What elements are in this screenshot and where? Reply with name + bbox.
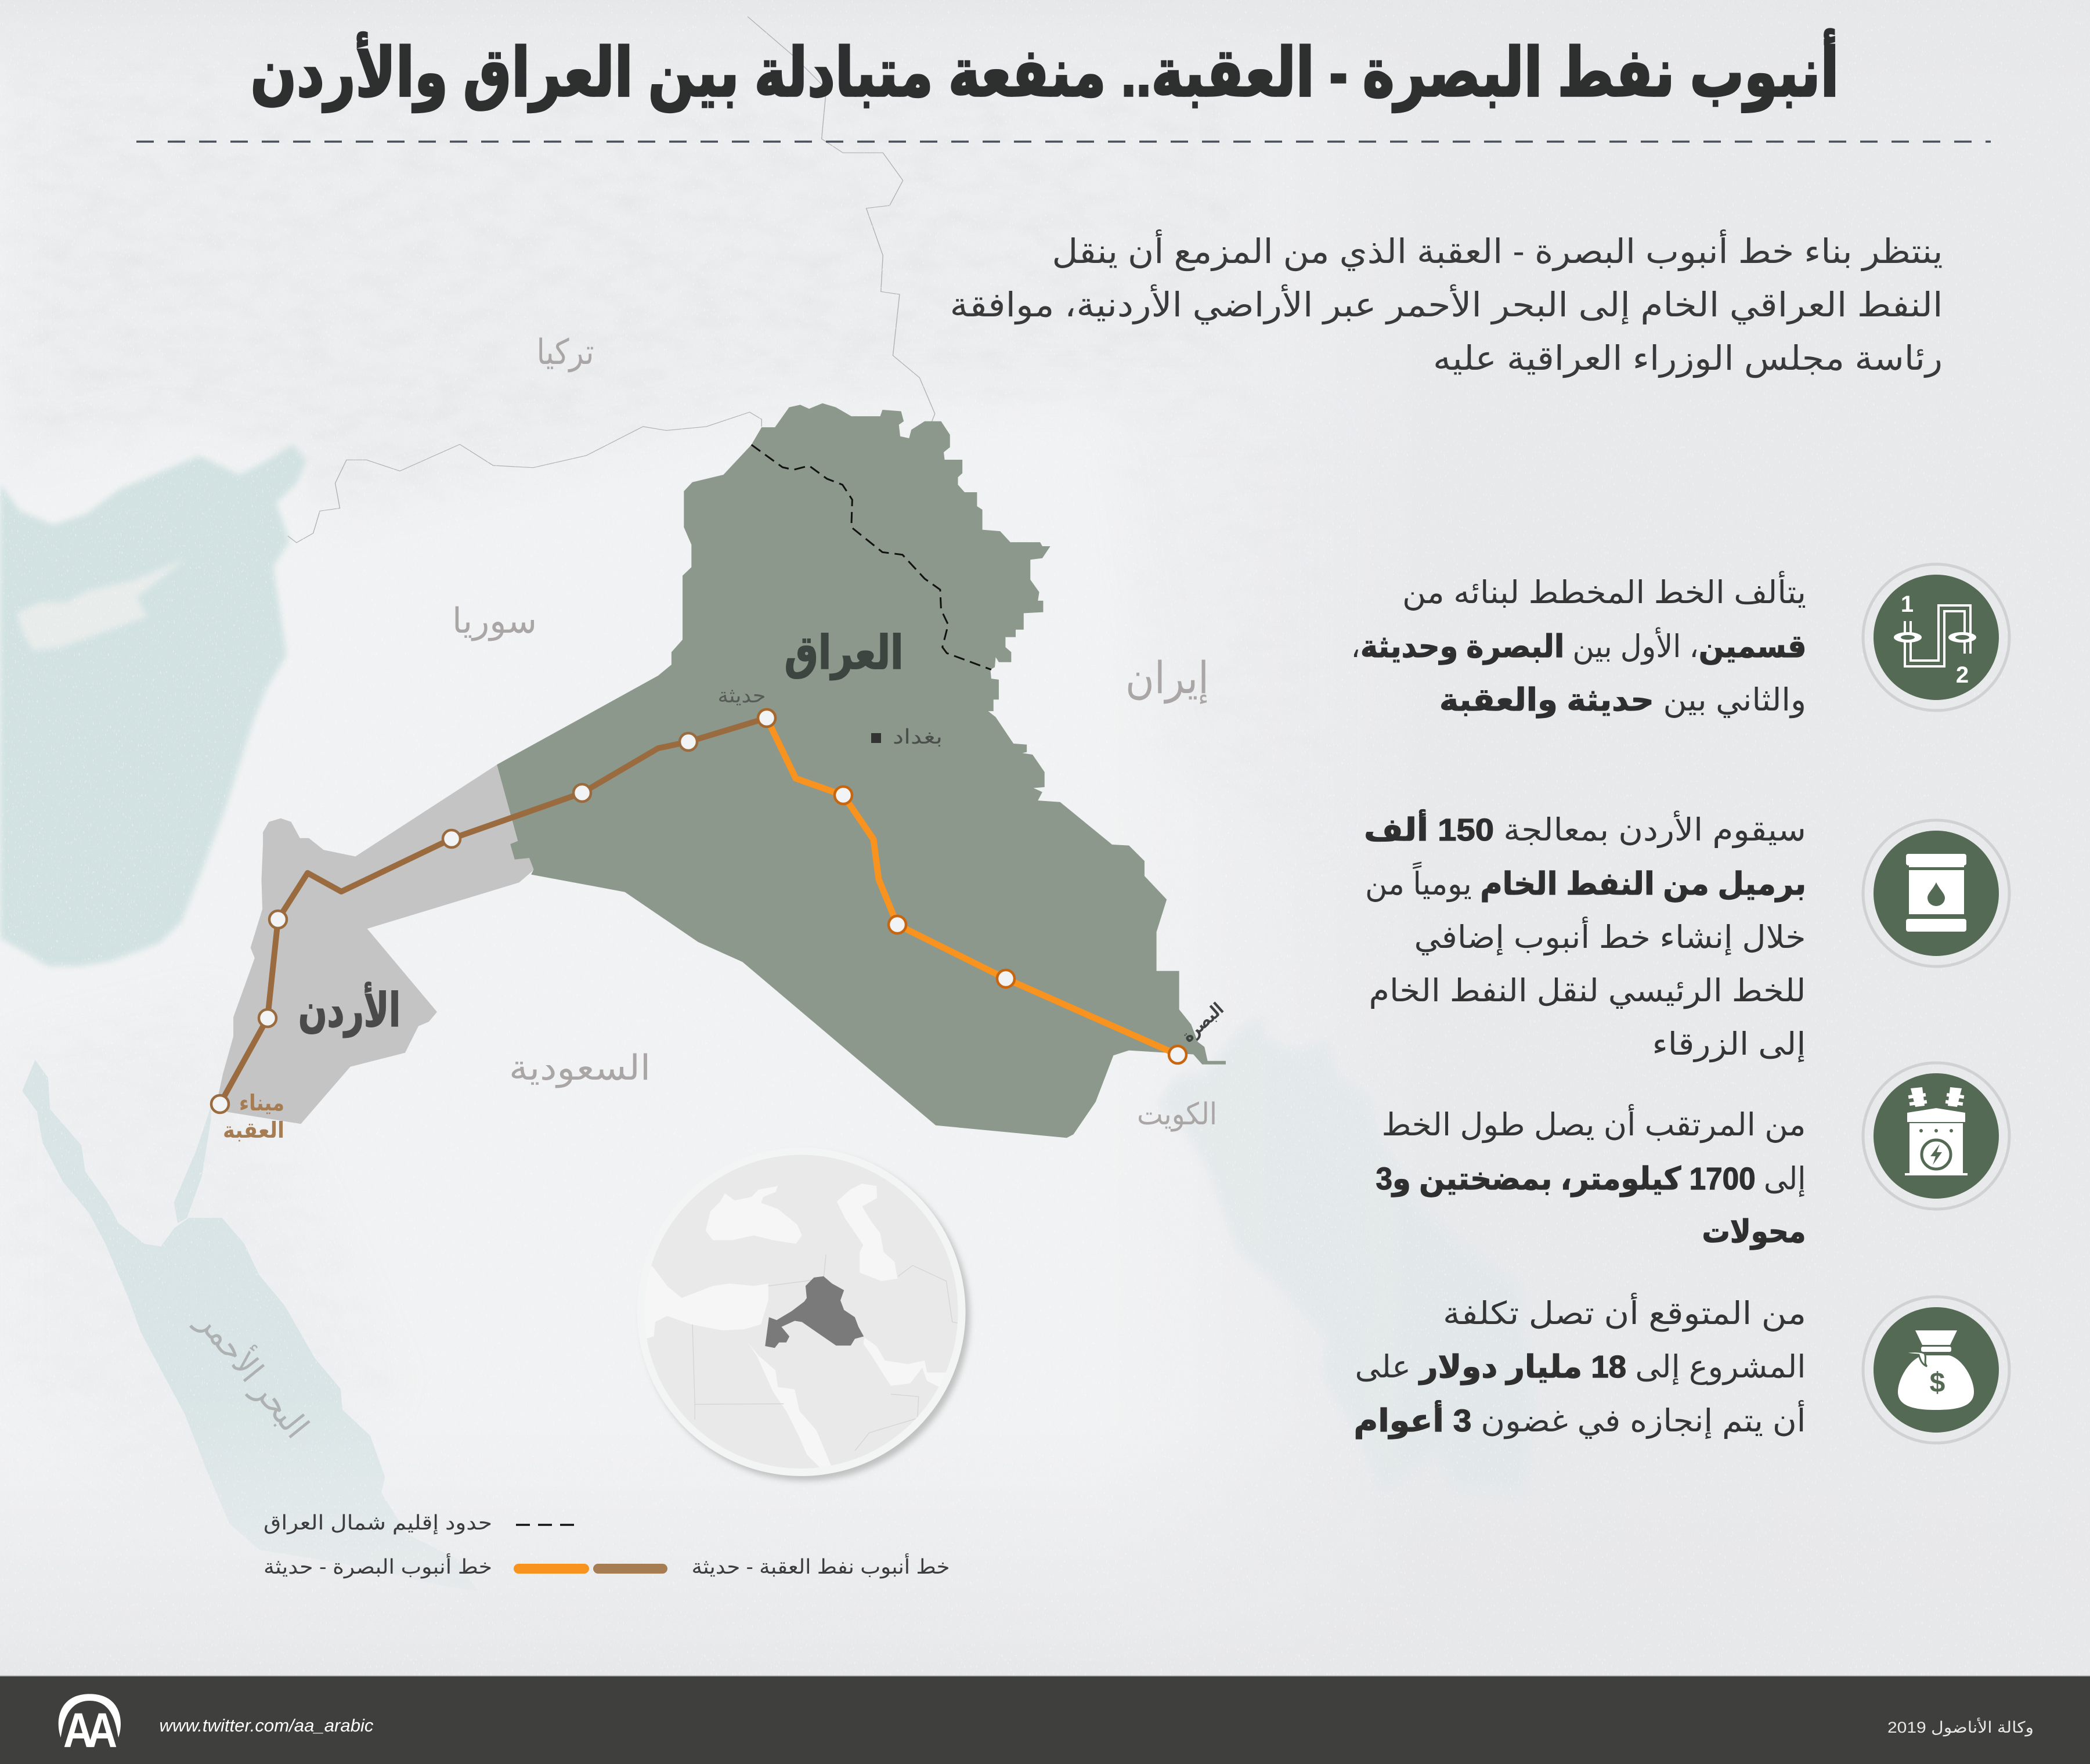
panel: Jordan processing: للخط الرئيسي لنقل النفط الخام xyxy=(1369,973,1806,1009)
panel: two sections xyxy=(1351,571,1806,718)
pipeline: Aqaba - Haditha xyxy=(211,718,767,1113)
panel: Jordan processing: خلال إنشاء خط أنبوب إضافي xyxy=(1414,917,1806,955)
map labels: العراق xyxy=(785,627,903,680)
icon: transformer xyxy=(1863,1063,2009,1209)
map labels: حديثة xyxy=(717,684,766,707)
map labels: الكويت xyxy=(1137,1098,1217,1132)
sea: Mediterranean xyxy=(0,445,306,966)
footer bar xyxy=(0,1676,2090,1764)
map labels: البحر الأحمر xyxy=(189,1301,317,1446)
icon: money bag xyxy=(1863,1297,2009,1443)
panel: Jordan processing xyxy=(1364,809,1806,1062)
map labels: السعودية xyxy=(509,1048,651,1088)
borders: Turkey, Syria, Iran xyxy=(288,17,935,543)
map: Iraq xyxy=(497,403,1226,1138)
map labels: العقبة xyxy=(223,1119,284,1143)
icon: money bag: $ xyxy=(1930,1368,1945,1398)
map labels: البصرة xyxy=(1178,1000,1228,1046)
panel: cost: من المتوقع أن تصل تكلفة xyxy=(1443,1293,1806,1332)
legend: خط أنبوب نفط العقبة - حديثة xyxy=(692,1553,950,1579)
map labels: الأردن xyxy=(298,982,400,1038)
logo: AA xyxy=(59,1694,121,1758)
map: northern Iraq region border xyxy=(752,445,991,670)
icon: pipeline sections xyxy=(1863,564,2009,710)
panel: length and stations: محولات xyxy=(1702,1214,1806,1250)
footer bar: وكالة الأناضول 2019 xyxy=(1887,1717,2034,1737)
panel: length and stations xyxy=(1376,1104,1806,1250)
logo: AA: AA xyxy=(63,1703,117,1758)
footer bar: www.twitter.com/aa_arabic xyxy=(159,1715,374,1736)
map labels: بغداد xyxy=(893,726,943,748)
legend: حدود إقليم شمال العراق xyxy=(263,1512,492,1535)
panel: cost: أن يتم إنجازه في غضون 3 أعوام xyxy=(1353,1400,1806,1439)
background: base map xyxy=(0,417,1137,1448)
map labels: إيران xyxy=(1125,654,1209,704)
intro text: ينتظر بناء خط أنبوب البصرة - العقبة الذي من المزمع أن ينقل xyxy=(1052,229,1943,272)
panel: two sections: يتألف الخط المخطط لبنائه من xyxy=(1402,571,1806,611)
intro text xyxy=(950,229,1943,378)
panel: length and stations: من المرتقب أن يصل طول الخط xyxy=(1381,1104,1806,1143)
locator globe xyxy=(633,1148,970,1481)
sea: Red Sea xyxy=(22,1060,478,1591)
icon: pipeline sections: 2 xyxy=(1956,662,1969,688)
panel: Jordan processing: برميل من النفط الخام يومياً من xyxy=(1365,861,1806,902)
pipeline: Basra - Haditha xyxy=(758,709,1186,1063)
panel: two sections: قسمين، الأول بين البصرة وحديثة، xyxy=(1351,627,1806,665)
map labels: ميناء xyxy=(239,1091,284,1116)
panel: two sections: والثاني بين حديثة والعقبة xyxy=(1439,683,1806,718)
icon: oil barrel xyxy=(1863,820,2009,966)
panel: Jordan processing: إلى الزرقاء xyxy=(1652,1027,1806,1062)
map labels: تركيا xyxy=(536,333,594,373)
panel: length and stations: إلى 1700 كيلومتر، بمضختين و3 xyxy=(1376,1161,1806,1197)
legend: خط أنبوب البصرة - حديثة xyxy=(263,1553,492,1579)
map labels xyxy=(189,333,1228,1446)
legend xyxy=(263,1512,950,1579)
map labels: سوريا xyxy=(452,601,537,641)
intro text: رئاسة مجلس الوزراء العراقية عليه xyxy=(1433,340,1943,378)
panel: cost xyxy=(1353,1293,1806,1439)
map: Jordan xyxy=(219,764,534,1124)
panel: Jordan processing: سيقوم الأردن بمعالجة 150 ألف xyxy=(1364,809,1806,848)
panel: cost: المشروع إلى 18 مليار دولار على xyxy=(1355,1350,1806,1385)
sea: Persian Gulf xyxy=(1156,1015,1537,1496)
intro text: النفط العراقي الخام إلى البحر الأحمر عبر الأراضي الأردنية، موافقة xyxy=(950,284,1943,325)
icon: pipeline sections: 1 xyxy=(1901,591,1914,617)
